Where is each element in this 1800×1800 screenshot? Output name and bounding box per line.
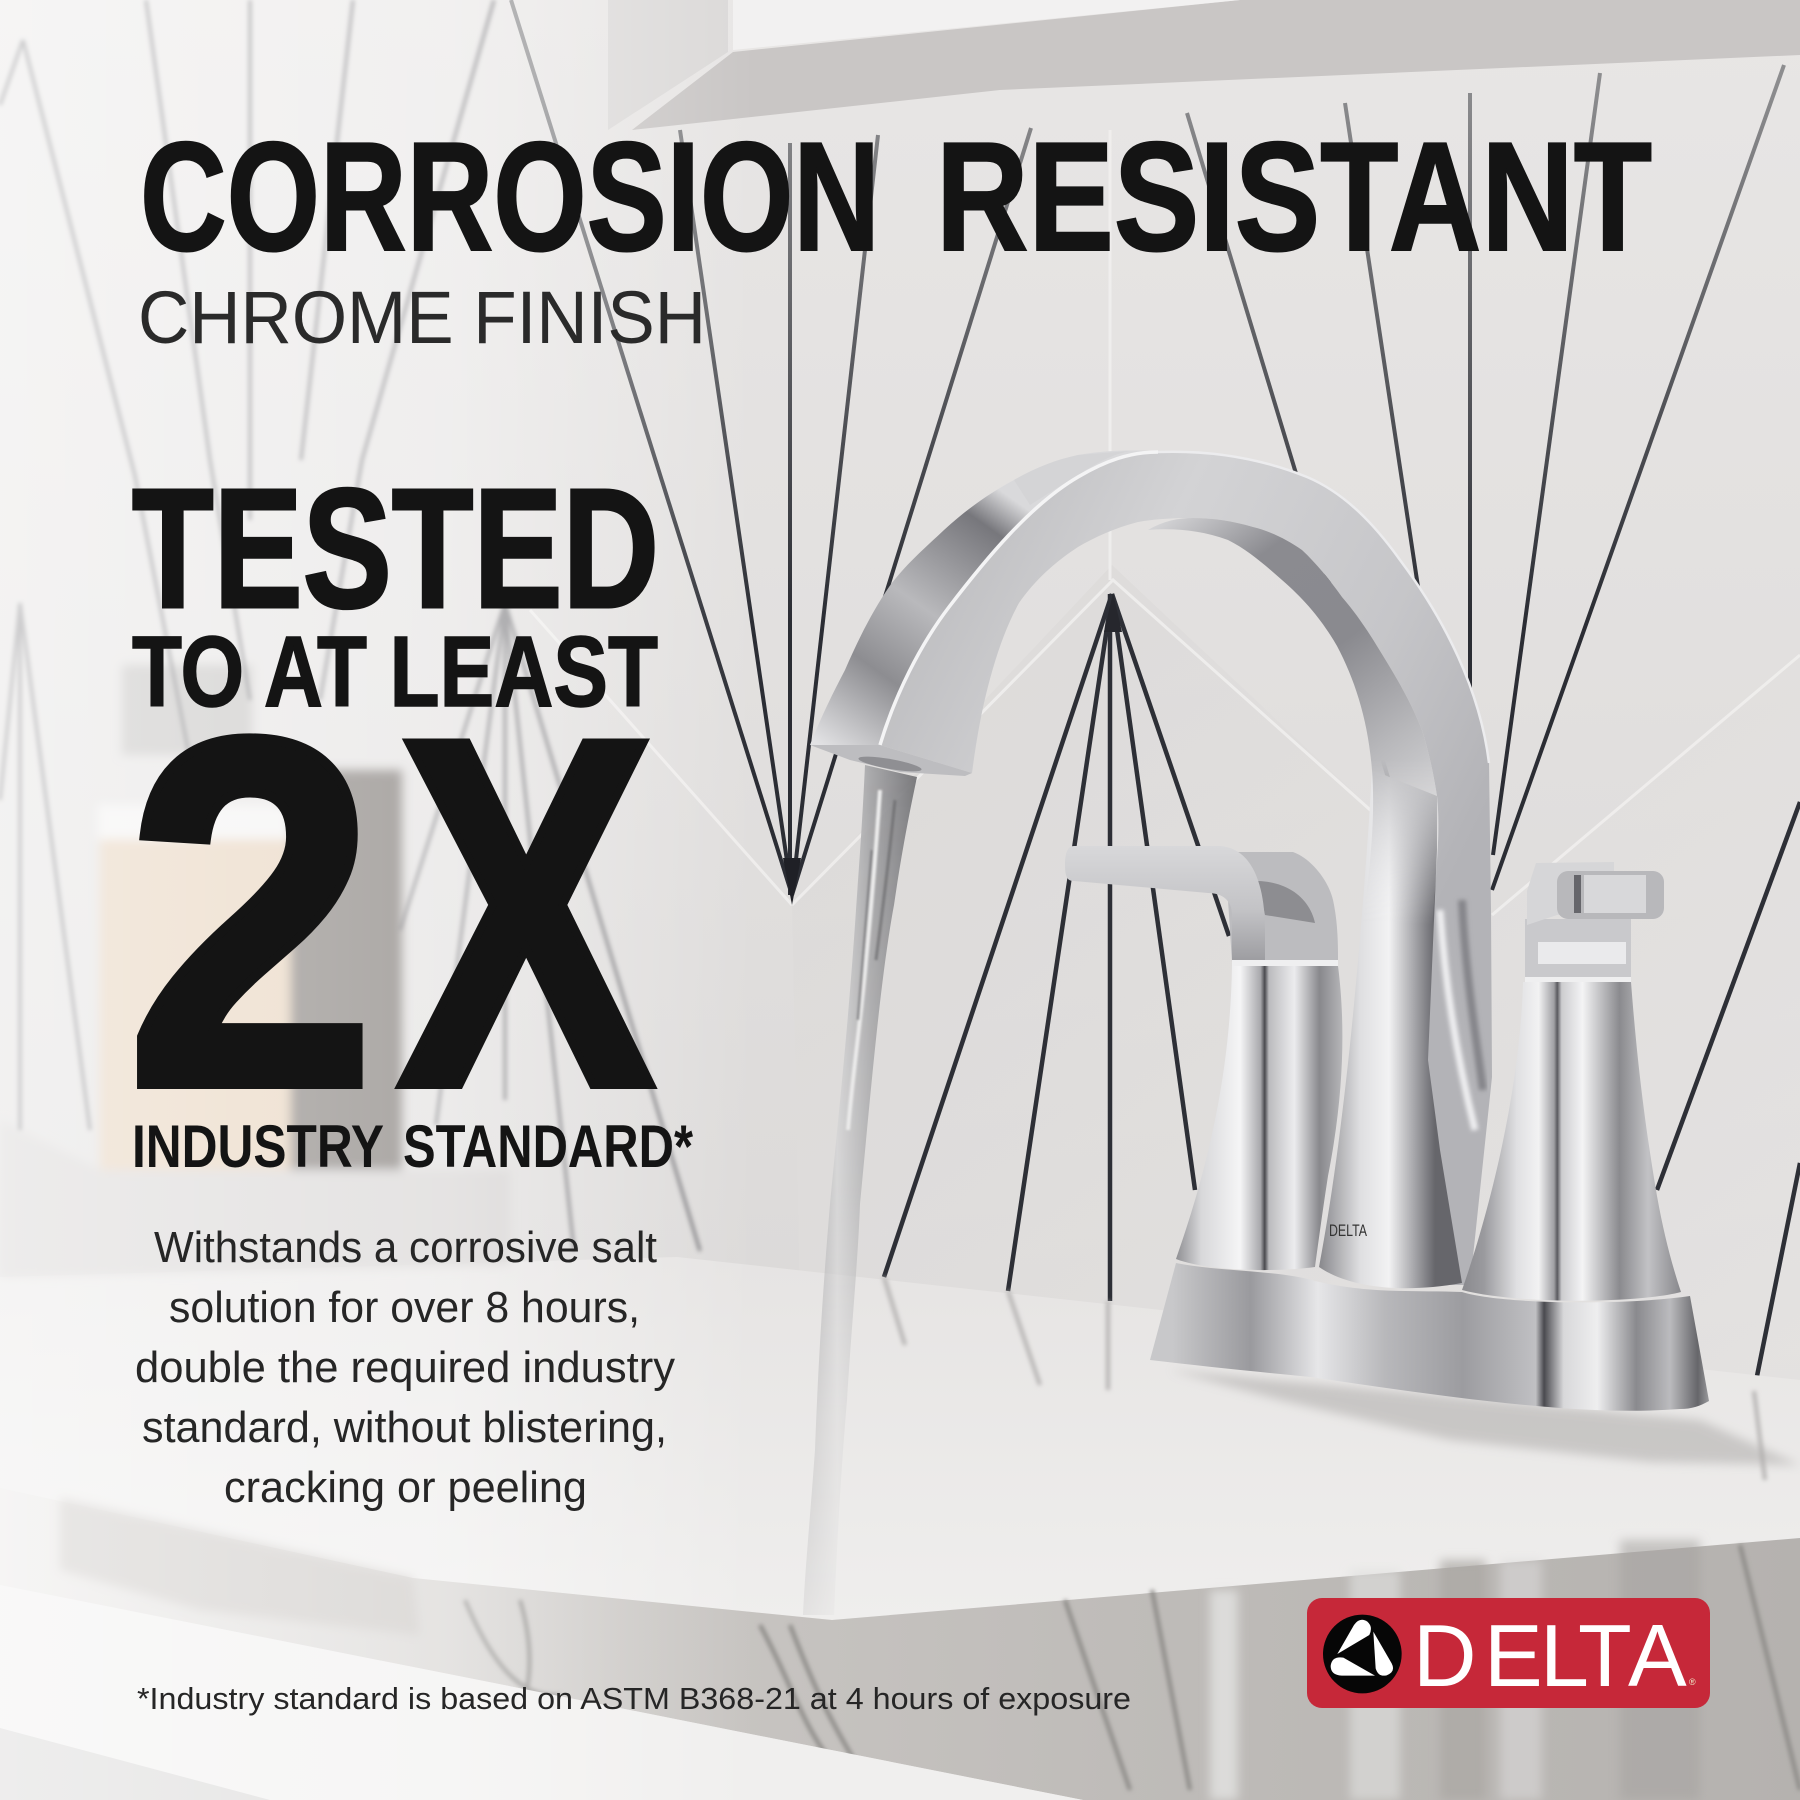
- collar ring: [1232, 960, 1338, 966]
- knob front: [1557, 871, 1664, 919]
- word 2: RESISTANT: [936, 110, 1652, 283]
- bottom left shadow corner: [0, 1728, 270, 1800]
- handle cone: [1176, 966, 1342, 1270]
- lever arm: [1065, 846, 1265, 962]
- second fan apex: [1104, 593, 1122, 632]
- dark bottle: [280, 770, 402, 1170]
- lower chevron tile: [792, 565, 1800, 1400]
- line 4: standard, without blistering,: [142, 1403, 667, 1452]
- line 3: double the required industry: [135, 1343, 675, 1392]
- left handle: [1065, 846, 1342, 1270]
- registered mark: ®: [1689, 1677, 1696, 1687]
- water stream: [803, 765, 917, 1615]
- arch outer highlight: [1158, 452, 1489, 763]
- knob face highlight: [1584, 875, 1646, 913]
- handle back hub: [1228, 852, 1338, 962]
- blurred bottle and tray group: [0, 665, 510, 1277]
- lower counter wedge: [0, 1585, 1083, 1800]
- stem: [1525, 919, 1631, 978]
- handle cone: [1462, 982, 1681, 1301]
- logo on column: DELTA: [1329, 1221, 1367, 1240]
- water ripples: [848, 790, 895, 1130]
- bright top opening: [733, 0, 1240, 50]
- faucet spout arch: [810, 450, 1492, 1288]
- faucet: [810, 450, 1709, 1411]
- line 1: Withstands a corrosive salt: [154, 1223, 657, 1272]
- logo icon: [1323, 1615, 1402, 1693]
- knob dark edge: [1574, 875, 1581, 913]
- claim block: [126, 454, 694, 1189]
- logo: Delta: [1307, 1598, 1710, 1708]
- right handle: [1462, 862, 1681, 1301]
- wall tile: [0, 0, 1800, 1400]
- counter top: [0, 1257, 1800, 1620]
- amber bottle: [100, 810, 290, 1180]
- tile seams: [530, 130, 1800, 915]
- column left panel: [1319, 770, 1462, 1288]
- word 1: CORROSION: [140, 110, 880, 283]
- bottle neck: [122, 665, 252, 755]
- reflected grout lines: [465, 1545, 1800, 1790]
- arch front face with right column panel: [880, 452, 1492, 1285]
- standard: STANDARD*: [403, 1113, 694, 1180]
- reflected streaks: [1210, 1540, 1700, 1800]
- to at least: TO AT LEAST: [132, 616, 658, 728]
- line reflections on counter: [884, 1277, 1765, 1480]
- tray: [0, 1120, 510, 1277]
- left spout face: [810, 450, 1158, 745]
- letter X: X: [398, 636, 656, 1189]
- spout underside: [810, 745, 972, 776]
- tested: TESTED: [132, 454, 659, 644]
- mirror surface under counter: [0, 1488, 1800, 1800]
- footnote: *Industry standard is based on ASTM B368-21 at 4 hours of exposure: [137, 1681, 1131, 1716]
- industry: INDUSTRY: [132, 1113, 384, 1180]
- stem highlight: [1538, 942, 1626, 964]
- title: [140, 110, 1652, 283]
- aerator: [858, 754, 922, 774]
- collar ring: [1525, 977, 1631, 982]
- ridge highlight: [880, 452, 1158, 745]
- subtitle: CHROME FINISH: [138, 276, 706, 359]
- inner hub shadow: [1258, 881, 1315, 923]
- fan apex: [783, 858, 801, 905]
- knob back: [1527, 862, 1614, 925]
- faucet reflection on counter: [1170, 1370, 1800, 1465]
- reflection block under counter on left: [60, 1498, 420, 1635]
- spout top textured lip: [1014, 451, 1130, 505]
- shelf side column: [608, 0, 728, 130]
- right panel reflections: [1440, 900, 1483, 1130]
- blurred left grout lines: [0, 0, 700, 1251]
- line 2: solution for over 8 hours,: [169, 1283, 640, 1332]
- description: [135, 1223, 675, 1512]
- deck plate: [1150, 1263, 1709, 1411]
- bottle cap: [98, 805, 290, 839]
- line 5: cracking or peeling: [224, 1463, 587, 1512]
- upper shelf underside: [632, 0, 1800, 130]
- upper fan of grout lines: [511, 0, 1784, 900]
- numeral 2: 2: [126, 636, 376, 1189]
- inner dark band: [1148, 518, 1438, 925]
- lower fan of grout lines: [884, 594, 1800, 1391]
- logo badge: [1307, 1598, 1710, 1708]
- logo wordmark: DELTA: [1413, 1606, 1687, 1705]
